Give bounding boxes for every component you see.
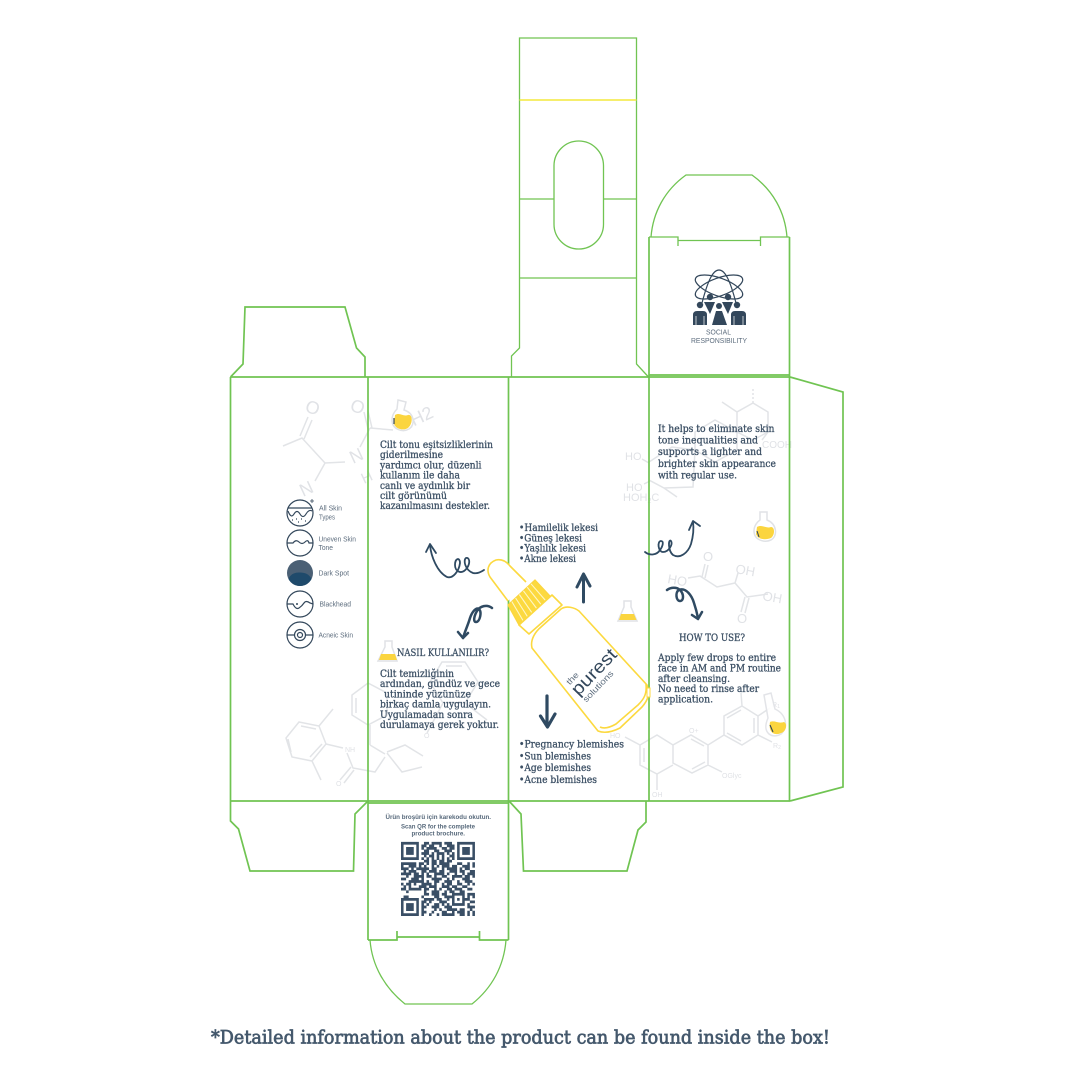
background molecule: middle right [666,549,783,626]
text block: english how to use: application. [658,694,713,706]
background molecule: bottom left: O [336,781,342,788]
background molecule: bottom right: HO [610,733,621,740]
text block: turkish benefit: kullanım ile daha [380,470,460,482]
text block: turkish benefit: yardımcı olur, düzenli [379,460,482,472]
text block: turkish how to use [380,667,500,731]
background molecule: middle right: O [703,549,713,564]
background molecule: bottom left: NH [345,747,355,754]
text block: turkish benefit [379,439,493,512]
list: english blemishes: •Age blemishes [519,762,591,774]
arrow: curly down right [667,588,702,619]
background molecule: top right: 2 [647,498,651,505]
text block: english how to use: No need to rinse after [658,683,760,695]
text block: english benefit: It helps to eliminate skin [658,423,775,435]
background molecule: top right: HOH [623,492,647,504]
label: blackhead: Blackhead [320,602,351,608]
background molecule: top left: H [359,468,376,488]
icon: social responsibility [692,270,746,325]
text block: english how to use: Apply few drops to entire [657,652,776,664]
arrow: straight down [540,696,555,727]
heading: how to use: HOW TO USE? [679,632,745,644]
text block: english how to use [657,652,781,706]
background molecule: middle right: OH [761,588,783,606]
text block: qr instruction: Ürün broşürü için karekodu okutun. [386,814,491,821]
list: turkish blemishes: •Güneş lekesi [519,532,583,544]
background molecule: top right [623,388,792,505]
icon: uneven skin tone [287,530,313,556]
text block: turkish how to use: durulamaya gerek yoktur. [380,719,499,731]
dropper bottle illustration [488,560,650,732]
label: uneven skin tone: Tone [318,545,333,552]
skin type icons and labels [287,499,356,648]
background molecule: middle right: HO [666,571,688,589]
bottle brand label [563,640,627,705]
text block: turkish how to use: ardından, gündüz ve gece [380,678,500,690]
background molecule: bottom right: OH [652,792,662,799]
list: english blemishes: •Pregnancy blemishes [519,738,624,750]
bottle body [532,607,650,732]
text block: turkish how to use: birkaç damla uygulayın. [380,698,491,710]
background molecule: top left: N [346,444,366,468]
background molecule: bottom left: O [424,733,430,740]
label: social responsibility: SOCIAL [706,330,731,336]
bottle pipette bulb [488,560,526,601]
list: english blemishes: •Acne blemishes [519,774,597,786]
icon: all skin types [287,499,314,526]
bottle ribbed cap [508,580,550,625]
background molecule: top left: NH2 [395,402,436,436]
text block: english how to use: after cleansing. [658,673,730,685]
arrow: curly up right [645,521,700,556]
icon: round flask right [754,512,776,541]
label: social responsibility [691,330,747,345]
text block: english benefit: with regular use. [658,470,737,482]
text block: english benefit: tone inequalities and [658,434,758,446]
bottle brand label: the [564,670,581,687]
text block: qr instruction [386,814,491,838]
footer note: *Detailed information about the product can be found inside the box! [211,1026,830,1048]
text block: turkish how to use: Cilt temizliğinin [380,667,454,680]
background molecule: bottom right: R [773,743,778,750]
arrow: curly up left [426,544,484,577]
arrow: curly down left [458,606,492,638]
icon: blackhead [287,591,313,617]
background molecule: bottom right: OGlyc [722,773,742,780]
background molecule: top left: N [296,477,316,501]
background molecule: top right: C [651,492,659,504]
icon: conical flask how to use [378,641,397,661]
label: uneven skin tone: Uneven Skin [318,536,356,544]
list: turkish blemishes: •Hamilelik lekesi [519,522,599,534]
icon: dark spot [287,560,313,586]
icon: round flask top left [392,400,413,431]
box dieline outline [230,38,843,1004]
background molecule: top right: COOH [762,440,792,451]
qr code [401,843,475,915]
text block: turkish benefit: kazanılmasını destekler. [380,500,490,512]
background molecule: bottom right: 1 [777,704,780,710]
background molecule: top left [283,395,436,501]
text block: qr instruction: product brochure. [412,832,465,838]
background molecule: top right: HO [626,482,643,494]
label: acneic skin: Acneic Skin [318,632,353,640]
background molecule: bottom right: 2 [778,745,781,751]
label: all skin types [319,506,342,522]
background molecule: bottom right: O+ [689,728,699,735]
list: english blemishes [519,738,624,786]
bottle brand label: solutions [581,668,615,704]
text block: turkish benefit: Cilt tonu eşitsizliklerinin [380,439,493,451]
background molecule: middle right: O [737,611,747,626]
background molecule: top right: HO [625,451,642,463]
label: dark spot: Dark Spot [318,570,349,578]
background molecule: bottom left [286,662,487,788]
background molecule: bottom right: R [772,702,777,709]
bottle brand label: purest [567,644,621,699]
text block: turkish how to use: utininde yüzünüze [384,688,471,700]
icon: tilted round flask lower right [764,693,786,736]
list: english blemishes: •Sun blemishes [519,750,591,762]
icon: acneic skin [287,622,313,648]
text block: english how to use: face in AM and PM routine [658,662,781,674]
text block: english benefit [658,423,776,482]
icon: conical flask middle [618,601,637,621]
label: all skin types: Types [319,514,335,522]
heading: nasil kullanilir: NASIL KULLANILIR? [397,647,489,659]
background molecule: top left: O [303,396,323,420]
label: all skin types: All Skin [319,506,342,512]
background molecule: middle right: OH [734,561,756,579]
text block: english benefit: supports a lighter and [658,446,762,458]
text block: turkish how to use: Uygulamadan sonra [380,709,473,721]
bottle collar [519,595,562,634]
background molecule: bottom right [610,693,781,799]
label: social responsibility: RESPONSIBILITY [691,338,747,345]
list: turkish blemishes [519,522,599,565]
text block: turkish benefit: giderilmesine [380,449,443,461]
text block: turkish benefit: canlı ve aydınlık bir [380,480,471,492]
list: turkish blemishes: •Yaşlılık lekesi [519,542,587,554]
list: turkish blemishes: •Akne lekesi [519,553,577,565]
text block: qr instruction: Scan QR for the complete [401,824,476,830]
arrow: straight up [577,574,590,602]
text block: english benefit: brighter skin appearance [658,458,776,470]
background molecule: top left: O [348,395,368,419]
label: uneven skin tone [318,536,356,552]
text block: turkish benefit: cilt görünümü [380,490,447,502]
